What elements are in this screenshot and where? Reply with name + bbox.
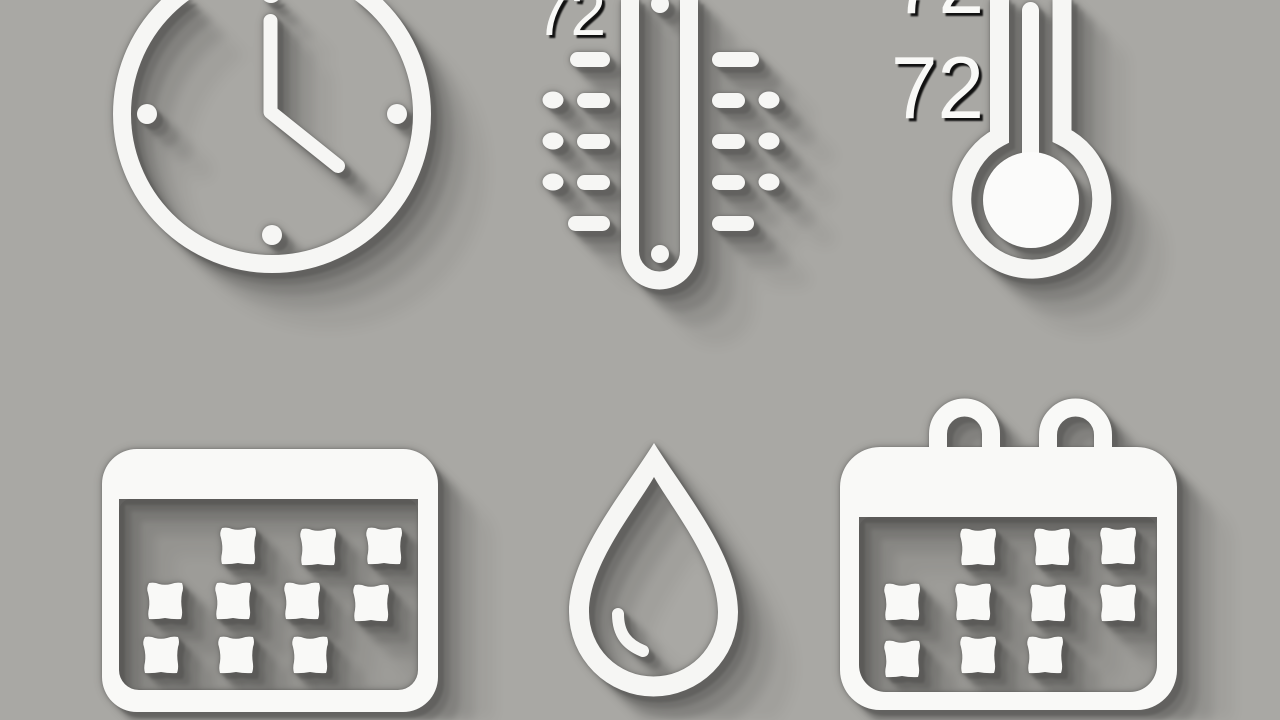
temperature label: lower right: 72 — [891, 38, 984, 137]
icon: calendar with rings — [840, 407, 1177, 710]
icon: calendar without rings — [102, 449, 438, 712]
icon: water drop — [569, 443, 738, 696]
icon: thermometer with scale ticks — [542, 0, 780, 280]
icon: bulb thermometer — [962, 0, 1102, 269]
icon: wall clock — [122, 0, 422, 264]
